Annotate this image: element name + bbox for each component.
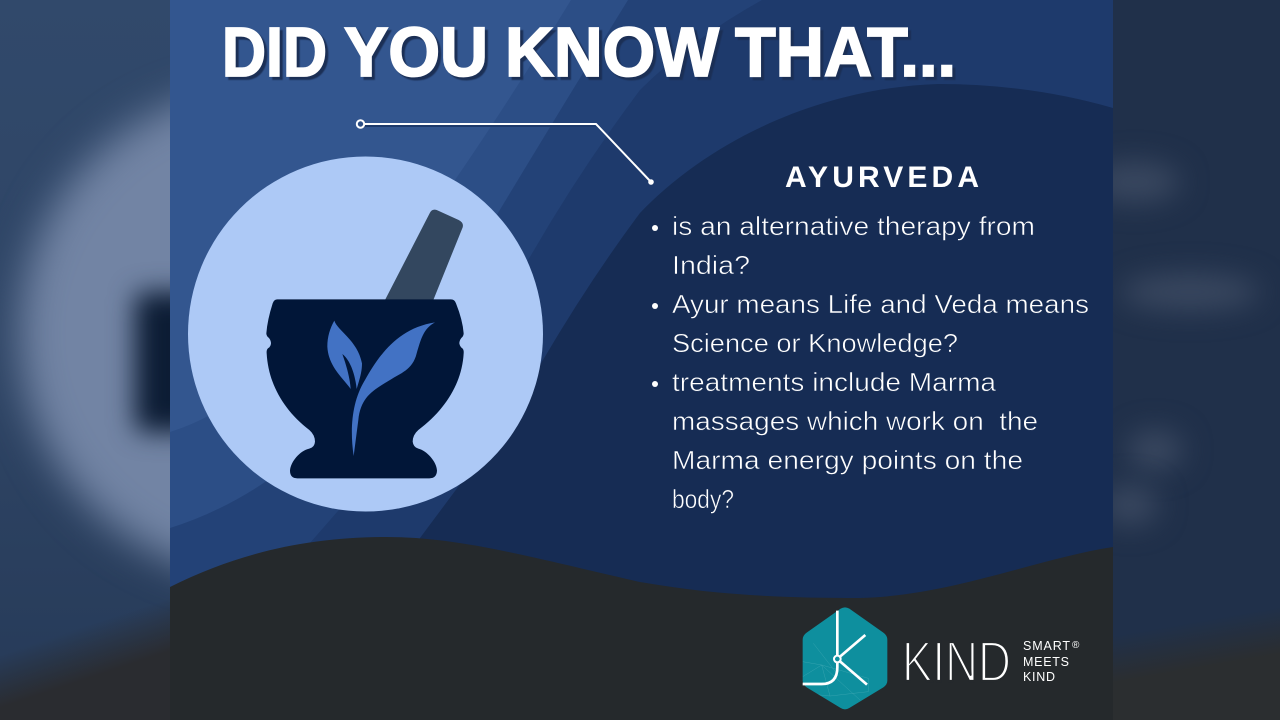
text block: facts list: Marma energy points on the xyxy=(672,445,1023,475)
text block: facts list: Ayur means Life and Veda means xyxy=(672,289,1089,319)
blurred backdrop: left side xyxy=(0,0,170,720)
connector line xyxy=(357,120,654,185)
title: KNOW xyxy=(505,13,719,91)
icon: mortar bowl xyxy=(266,299,464,478)
logo tagline: SMART xyxy=(1023,639,1070,653)
icon: teal hexagon with K mark xyxy=(803,607,887,709)
text block: facts list: Science or Knowledge? xyxy=(672,328,958,358)
text block: facts list: massages which work on the xyxy=(672,406,1038,436)
logo tagline: KIND xyxy=(1023,670,1055,684)
logo tagline: MEETS xyxy=(1023,655,1069,669)
blurred backdrop: right side xyxy=(1113,157,1280,720)
title: DID xyxy=(222,13,327,91)
heading: Ayurveda: AYURVEDA xyxy=(785,161,979,194)
title: YOU xyxy=(344,13,488,91)
dark ground wave xyxy=(170,537,1113,720)
title: THAT... xyxy=(735,13,956,91)
text block: facts list: is an alternative therapy from xyxy=(672,211,1035,241)
main panel background with curved bands xyxy=(170,0,1113,720)
text block: facts list xyxy=(652,211,1089,514)
logo wordmark: KIND xyxy=(902,630,1011,694)
logo: Kind xyxy=(803,607,1080,709)
text block: facts list: treatments include Marma xyxy=(672,367,997,397)
icon: left leaf xyxy=(327,321,362,389)
icon: mortar and pestle in circle xyxy=(188,156,543,512)
text block: facts list: India? xyxy=(672,250,750,280)
logo tagline: ® xyxy=(1072,640,1080,651)
text block: facts list: body? xyxy=(672,484,734,514)
icon: right leaf xyxy=(352,322,435,456)
logo tagline xyxy=(1023,639,1080,684)
icon: pestle xyxy=(385,210,463,300)
title xyxy=(222,13,956,91)
